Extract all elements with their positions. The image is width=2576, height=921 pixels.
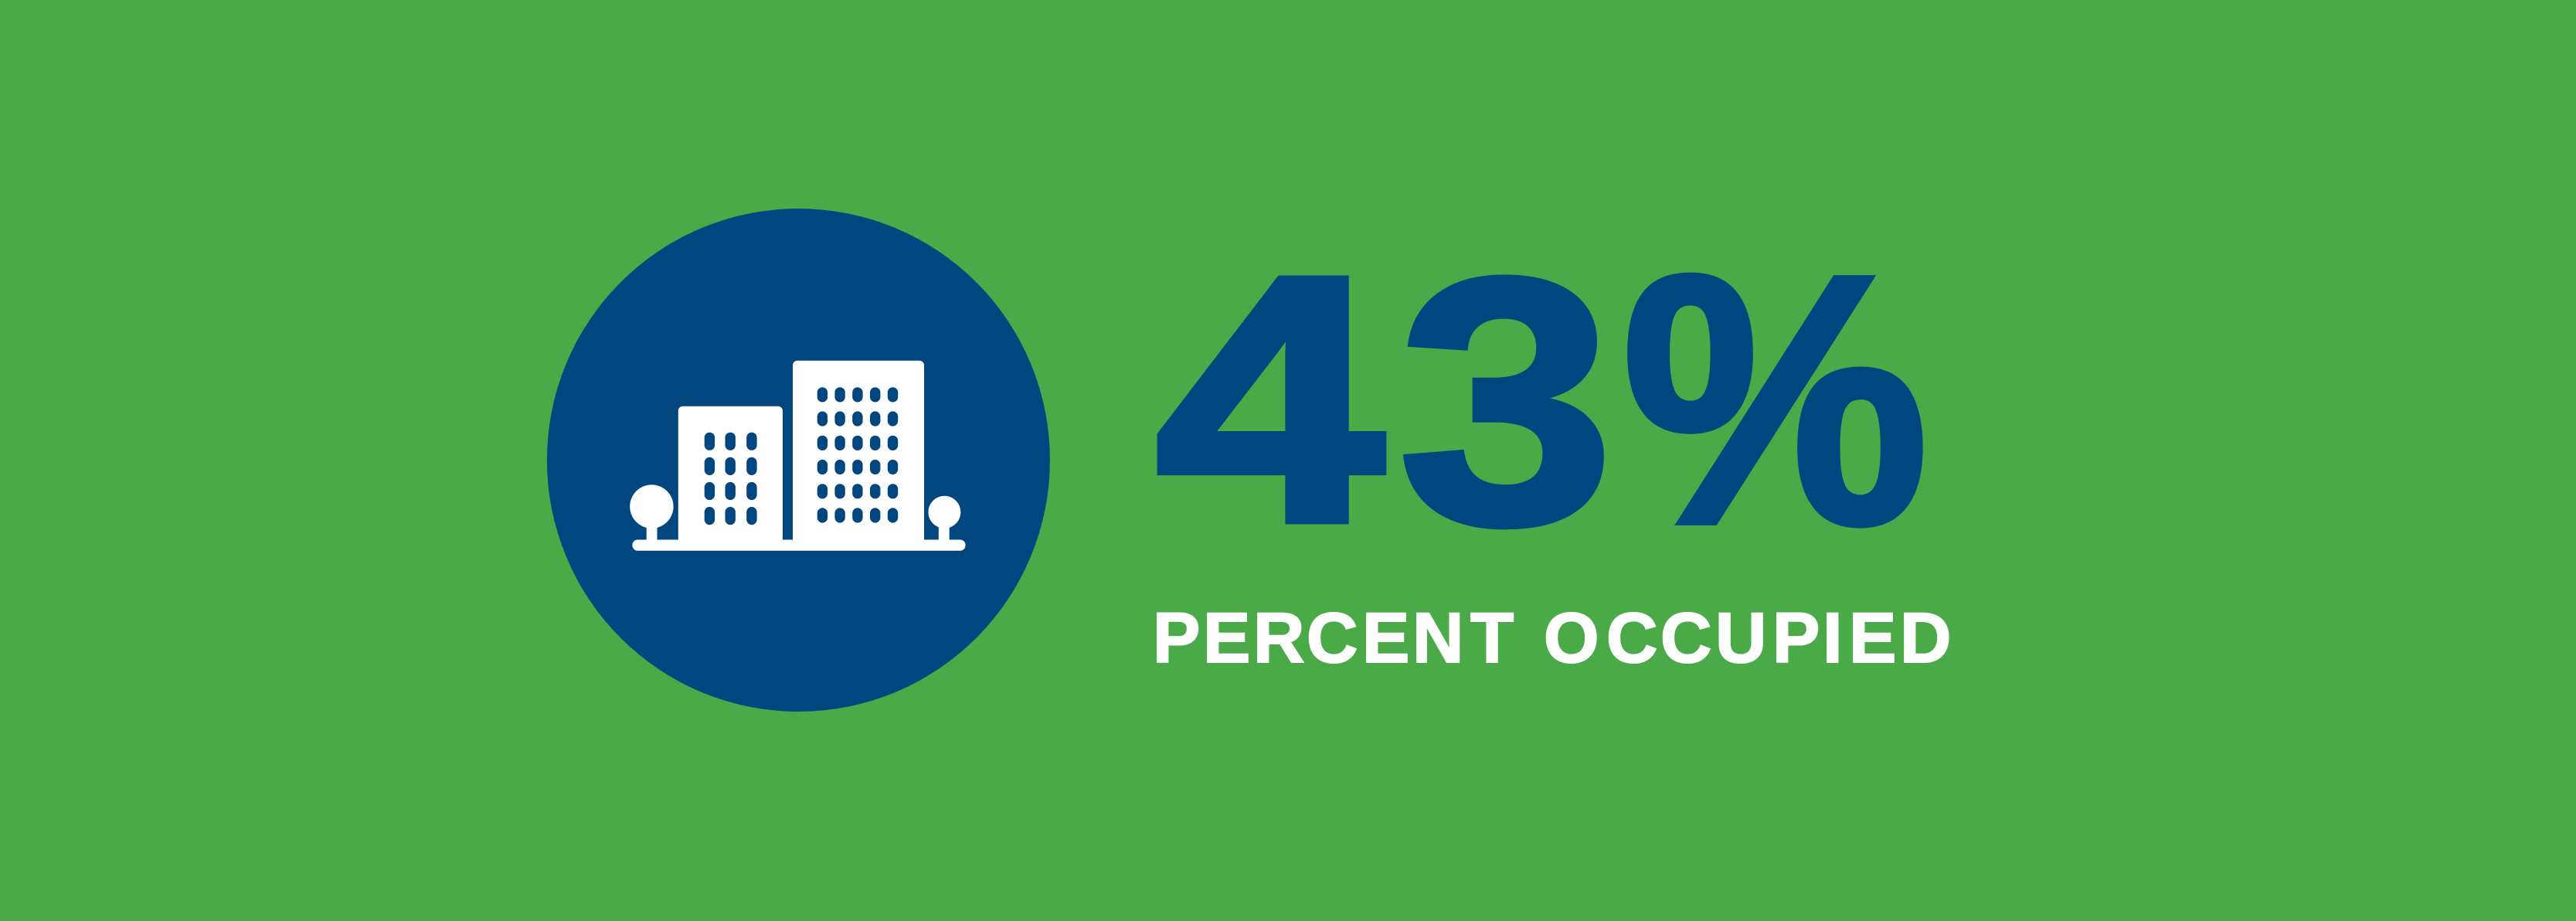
icon: tall building	[793, 361, 924, 545]
icon badge: city buildings in circle	[547, 209, 1050, 712]
big statistic: 43%: 4	[1156, 205, 1386, 594]
icon: short building	[678, 406, 783, 545]
big statistic: 43%: %	[1622, 202, 1929, 598]
label: percent occupied: PERCENT OCCUPIED	[1153, 599, 1951, 678]
icon: ground line	[632, 539, 966, 551]
badge circle	[547, 209, 1050, 712]
icon: left tree	[630, 484, 674, 545]
big statistic: 43%: 3	[1398, 205, 1615, 597]
icon: right tree	[928, 496, 960, 545]
big statistic: 43%	[1156, 202, 1929, 598]
